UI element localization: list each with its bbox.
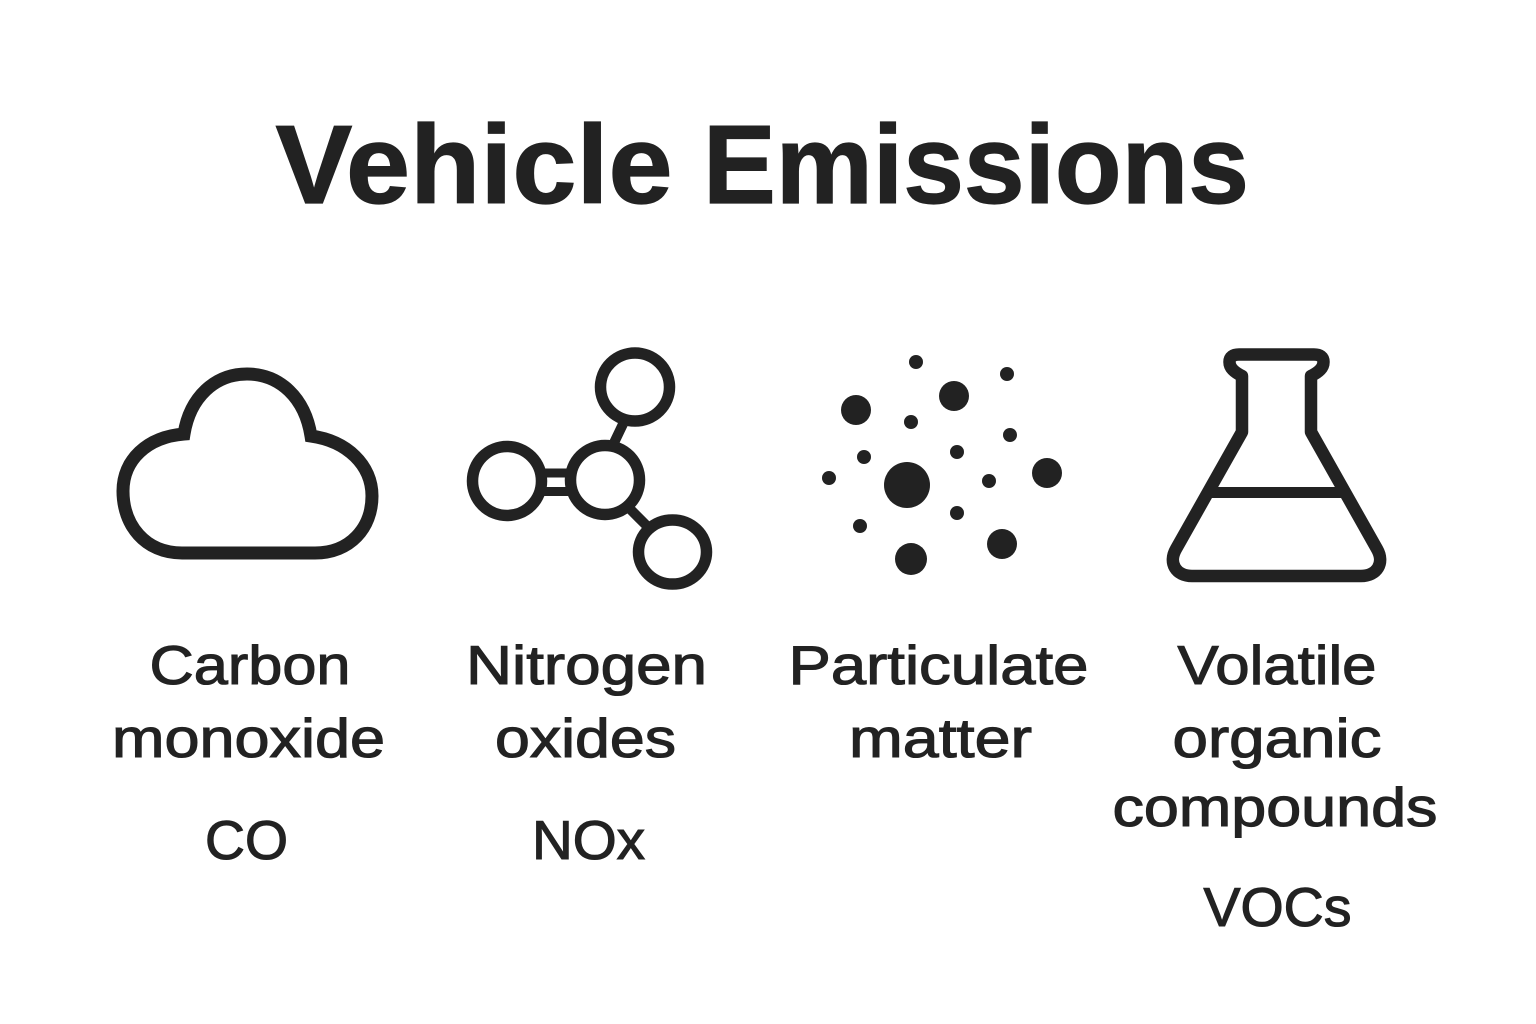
label: volatile organic compounds	[1112, 634, 1438, 838]
title: Emissions	[703, 103, 1249, 227]
icon: particles	[822, 355, 1062, 575]
label: particulate matter: Particulate	[788, 634, 1088, 696]
formula: NOx: NOx	[532, 809, 645, 871]
label: volatile organic compounds: organic	[1172, 707, 1382, 769]
icon: cloud	[123, 374, 372, 553]
label: carbon monoxide: monoxide	[112, 707, 385, 769]
title: Vehicle	[276, 103, 672, 227]
icon: flask	[1173, 354, 1380, 576]
formula: VOCs: VOCs	[1204, 876, 1352, 938]
title	[276, 103, 1249, 227]
label: carbon monoxide	[112, 634, 385, 769]
label: nitrogen oxides: Nitrogen	[466, 634, 707, 696]
label: carbon monoxide: Carbon	[150, 634, 350, 696]
formula: CO: CO	[205, 809, 288, 871]
label: nitrogen oxides: oxides	[495, 707, 676, 769]
icon: molecule	[472, 353, 706, 584]
label: particulate matter	[788, 634, 1088, 769]
label: volatile organic compounds: compounds	[1112, 776, 1438, 838]
label: nitrogen oxides	[466, 634, 707, 769]
label: volatile organic compounds: Volatile	[1178, 634, 1376, 696]
label: particulate matter: matter	[849, 707, 1032, 769]
